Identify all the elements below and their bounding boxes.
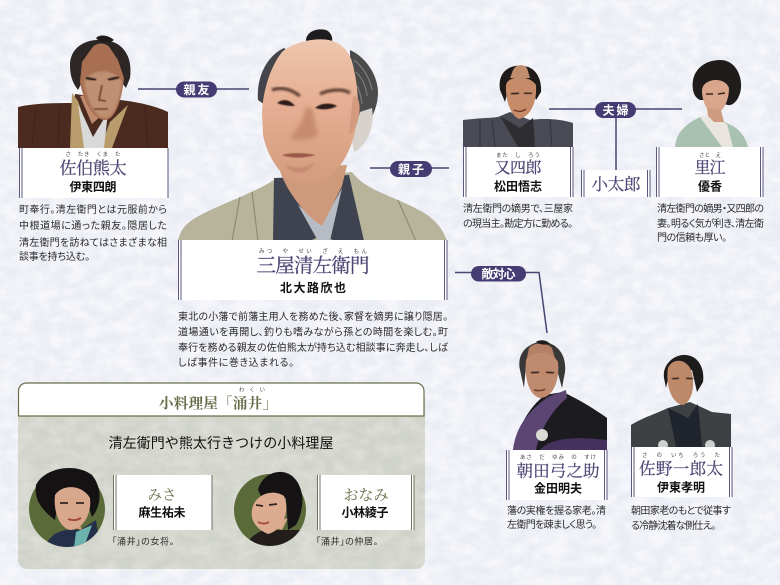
name card: Seizaemon bbox=[178, 240, 447, 300]
description: Rie bbox=[657, 202, 764, 244]
name card: Matashiro bbox=[463, 147, 573, 197]
name card: Saeki: 佐伯熊太 bbox=[60, 159, 126, 178]
panel header: わ く い bbox=[239, 386, 265, 394]
connector: friends bbox=[138, 82, 249, 98]
name card: Rie: 優香 bbox=[698, 178, 722, 194]
description: Seizaemon: 道場通いを再開し、釣りも嗜みながら孫との時間を楽しむ。町 bbox=[178, 326, 448, 338]
connector: rivalry bbox=[455, 266, 547, 333]
description: Misa: 「涌井」の女将。 bbox=[112, 536, 174, 546]
description: Matashiro bbox=[463, 202, 573, 230]
character: Mitsuya Seizaemon bbox=[178, 29, 448, 369]
name card: Asada: 金田明夫 bbox=[534, 480, 582, 496]
description: Rie: 清左衛門の嫡男・又四郎の bbox=[657, 202, 764, 215]
name card: Saeki: 伊東四朗 bbox=[70, 179, 116, 194]
description: Matashiro: 清左衛門の嫡男で、三屋家 bbox=[463, 202, 573, 215]
name card: Rie bbox=[656, 147, 763, 197]
name card: Saeki bbox=[19, 148, 168, 198]
portrait: Misa bbox=[29, 468, 105, 547]
panel header bbox=[18, 383, 424, 416]
portrait: Asada bbox=[513, 340, 607, 450]
character: Matashiro bbox=[463, 65, 573, 230]
description: Onami: 「涌井」の仲居。 bbox=[316, 536, 378, 546]
character: Asada Yuminosuke bbox=[506, 340, 607, 531]
portrait: Sano bbox=[631, 355, 731, 450]
name card: Sano: さ の いち ろう た bbox=[642, 452, 720, 459]
description: Seizaemon bbox=[178, 310, 448, 369]
portrait: Matashiro bbox=[463, 65, 573, 147]
name card: Sano bbox=[631, 447, 732, 497]
description: Saeki: 談事を持ち込む。 bbox=[19, 250, 90, 263]
name card: Seizaemon: 北大路欣也 bbox=[280, 280, 346, 295]
name card: Asada bbox=[506, 450, 607, 500]
description: Asada bbox=[507, 504, 606, 531]
connector: parent and child bbox=[370, 161, 449, 177]
portrait: Saeki bbox=[18, 36, 168, 148]
description: Matashiro: の現当主。勘定方に勤める。 bbox=[463, 217, 573, 230]
name card: Onami: おなみ bbox=[344, 487, 388, 504]
panel: Wakui restaurant bbox=[18, 383, 425, 569]
name card: Asada: あさ だ ゆみ の すけ bbox=[520, 454, 596, 461]
portrait: Seizaemon bbox=[178, 29, 447, 241]
name card: Misa: 麻生祐未 bbox=[138, 504, 186, 520]
name card: Asada: 朝田弓之助 bbox=[516, 462, 600, 480]
description: Asada: 藩の実権を握る家老。清 bbox=[507, 504, 606, 517]
name card: Sano: 佐野一郎太 bbox=[639, 460, 723, 478]
character: Saeki Kumata bbox=[18, 36, 168, 263]
name card: Sano: 伊東孝明 bbox=[657, 480, 705, 494]
name card: Onami: 小林綾子 bbox=[342, 504, 388, 520]
name card: Misa: みさ bbox=[148, 488, 176, 504]
description: Saeki: 町奉行。清左衛門とは元服前から bbox=[19, 203, 167, 216]
name card: Seizaemon: 三屋清左衛門 bbox=[256, 255, 370, 277]
description: Seizaemon: 奉行を務める親友の佐伯熊太が持ち込む相談事に奔走し、しば bbox=[178, 341, 448, 354]
description: Asada: 左衛門を疎ましく思う。 bbox=[507, 518, 597, 531]
name card: Seizaemon: みつ や せい ざ え もん bbox=[259, 247, 367, 255]
name card: Kotaro: 小太郎 bbox=[592, 175, 640, 194]
portrait: Onami bbox=[234, 472, 306, 547]
panel header: 小料理屋「涌井」 bbox=[159, 394, 277, 412]
name card: Onami bbox=[317, 475, 414, 530]
panel subtitle: 清左衛門や熊太行きつけの小料理屋 bbox=[108, 435, 334, 451]
description: Saeki bbox=[19, 203, 167, 263]
description: Saeki: 中根道場に通った親友。隠居した bbox=[19, 219, 167, 232]
name card: Kotaro bbox=[581, 170, 650, 197]
portrait: Rie bbox=[675, 60, 748, 147]
description: Seizaemon: 東北の小藩で前藩主用人を務めた後、家督を嫡男に譲り隠居。 bbox=[178, 310, 448, 323]
name card: Misa bbox=[113, 475, 212, 530]
description: Sano: 朝田家老のもとで従事す bbox=[631, 504, 731, 517]
connector: parent and child: 親子 bbox=[398, 162, 424, 176]
connector: rivalry: 敵対心 bbox=[482, 266, 516, 281]
character: Sano Ichirota bbox=[631, 355, 732, 532]
description: Seizaemon: しば事件に巻き込まれる。 bbox=[178, 356, 294, 369]
connector: friends: 親友 bbox=[184, 82, 210, 97]
name card: Saeki: さ たき くま た bbox=[66, 151, 120, 158]
description: Saeki: 清左衛門を訪ねてはさまざまな相 bbox=[19, 236, 167, 249]
name card: Rie: 里江 bbox=[694, 159, 726, 177]
name card: Matashiro: 松田悟志 bbox=[494, 178, 542, 194]
description: Rie: 妻。明るく気が利き、清左衛 bbox=[657, 217, 764, 230]
name card: Matashiro: 又四郎 bbox=[494, 159, 542, 177]
character: Rie bbox=[656, 60, 764, 244]
connector: married couple bbox=[549, 102, 682, 170]
name card: Matashiro: また し ろう bbox=[496, 152, 540, 159]
connector: married couple: 夫婦 bbox=[602, 102, 628, 118]
description: Sano: る冷静沈着な側仕え。 bbox=[631, 519, 716, 532]
name card: Rie: さと え bbox=[699, 152, 721, 159]
description: Sano bbox=[631, 504, 731, 532]
description: Rie: 門の信頼も厚い。 bbox=[657, 231, 727, 244]
